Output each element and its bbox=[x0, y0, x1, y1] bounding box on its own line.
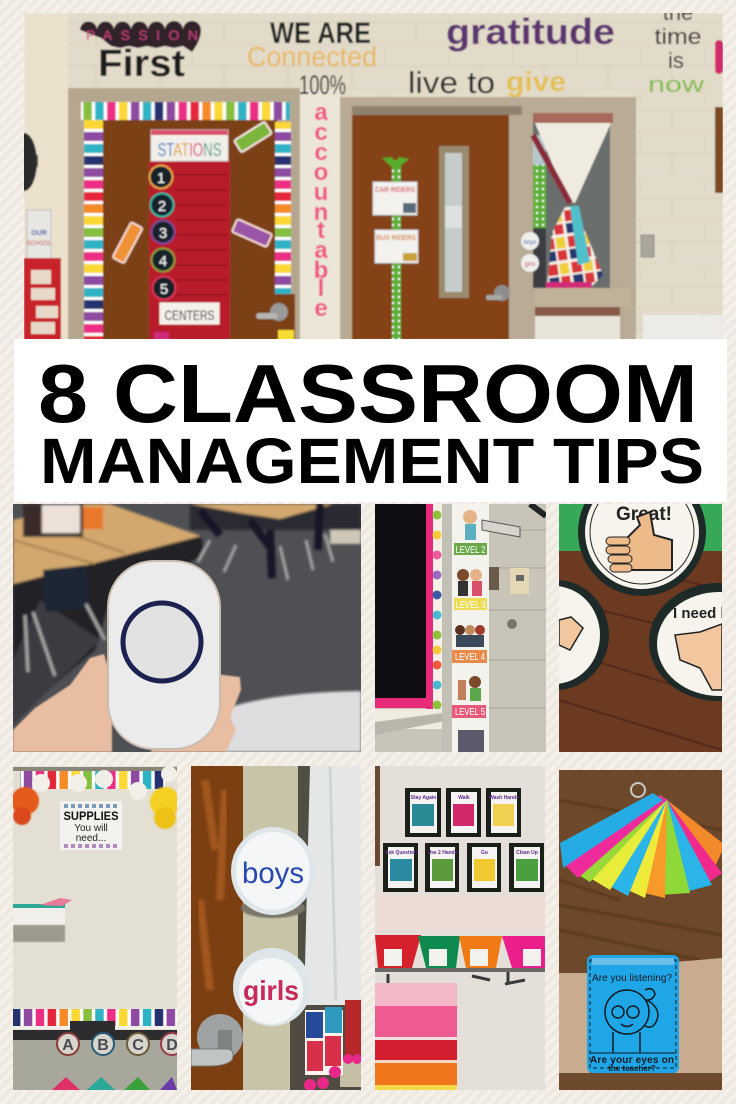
wall word: gratitude: gratitude bbox=[446, 11, 615, 52]
curtain bbox=[533, 113, 613, 288]
left door bbox=[68, 88, 300, 340]
left poster and red chart: OUR bbox=[31, 230, 47, 237]
card: great bbox=[578, 504, 706, 596]
pencils bbox=[112, 122, 272, 263]
boys and girls passes: girls bbox=[524, 262, 536, 268]
wall word: the time is now: now bbox=[648, 72, 704, 97]
door handle bbox=[256, 303, 288, 321]
poster grid: Ask Question bbox=[385, 850, 417, 856]
window bbox=[533, 113, 610, 288]
left poster and red chart: SCHOOL bbox=[26, 241, 52, 247]
supplies sign bbox=[60, 801, 122, 850]
photo: color fan and blue wristband bbox=[559, 770, 725, 1090]
level chart: LEVEL 5 bbox=[455, 707, 485, 718]
wall word: accountable vertical: a bbox=[314, 99, 328, 126]
supplies sign: You will bbox=[74, 823, 108, 834]
pocket chart with numbers: CENTERS bbox=[164, 307, 214, 323]
poster grid: Go bbox=[481, 850, 488, 856]
level chart: LEVEL 3 bbox=[456, 600, 486, 611]
wall fixtures bbox=[489, 504, 546, 629]
paper lanterns bbox=[32, 766, 177, 800]
poster grid: Use 2 Hands bbox=[427, 850, 458, 856]
pocket chart with numbers bbox=[149, 130, 230, 340]
photo: boys and girls pass knobs bbox=[191, 766, 362, 1091]
wall word: Passion First bbox=[80, 21, 201, 85]
girls knob bbox=[233, 948, 311, 1026]
title banner bbox=[14, 339, 727, 502]
card: left thumb bbox=[559, 580, 609, 690]
door lever bbox=[191, 1014, 243, 1066]
colored bins bbox=[375, 935, 545, 972]
wall word: live to give bbox=[409, 70, 566, 98]
wall word: accountable vertical: l bbox=[318, 275, 324, 302]
wall word: accountable vertical: b bbox=[314, 257, 328, 284]
hand bbox=[13, 654, 241, 752]
wall word: the time is now: is bbox=[668, 48, 684, 73]
pocket chart with numbers: 4 bbox=[159, 253, 167, 270]
boys knob: boys bbox=[242, 857, 304, 890]
right door bbox=[340, 97, 636, 340]
bulletin board bbox=[375, 504, 442, 735]
pocket chart with numbers: 2 bbox=[158, 198, 166, 215]
curtain bbox=[304, 766, 361, 1075]
arrow sign bbox=[482, 520, 520, 537]
poster grid: Clean Up bbox=[516, 850, 538, 856]
tissue flowers bbox=[11, 787, 180, 829]
button ring bbox=[123, 603, 201, 681]
wall word: accountable vertical: c bbox=[314, 139, 328, 166]
hanging tags bbox=[52, 1077, 177, 1090]
wall word: the time is now: the bbox=[663, 0, 693, 25]
tables bbox=[13, 504, 333, 584]
wall word: live to give: give bbox=[506, 66, 566, 97]
photo: supplies wall bbox=[11, 766, 183, 1090]
shelf brackets bbox=[388, 972, 525, 985]
wall word: the time is now: time bbox=[654, 24, 702, 49]
boys and girls passes bbox=[521, 232, 539, 272]
photo: classroom doors and wall words bbox=[11, 0, 723, 340]
rainbow border top bbox=[20, 771, 165, 789]
wall word: Passion First: First bbox=[98, 43, 185, 85]
wall tray bbox=[13, 898, 72, 942]
poster grid: Walk bbox=[458, 795, 470, 801]
boys and girls passes: boys bbox=[524, 240, 536, 246]
card: I need help bbox=[649, 583, 722, 701]
wristband: Are your eyes on bbox=[590, 1055, 674, 1066]
pocket chart with numbers: 5 bbox=[160, 281, 168, 298]
wall word: the time is now bbox=[649, 13, 704, 93]
pocket chart with numbers: 3 bbox=[159, 225, 167, 242]
level chart bbox=[452, 504, 489, 752]
pocket chart with numbers: 1 bbox=[157, 170, 165, 187]
level chart: LEVEL 4 bbox=[455, 652, 485, 663]
pompoms bbox=[304, 1054, 362, 1091]
ribbon with cards: CAR RIDERS bbox=[375, 187, 415, 194]
wall word: accountable vertical: o bbox=[314, 159, 328, 186]
fan of colored strips bbox=[560, 793, 725, 898]
wall word: Passion First: PASSION bbox=[86, 27, 198, 43]
poster grid: Stay Again bbox=[411, 795, 436, 801]
poster grid bbox=[383, 788, 544, 892]
supplies sign: need... bbox=[76, 833, 106, 844]
rainbow border bottom bbox=[13, 1009, 177, 1026]
poster grid: Wash Hands bbox=[489, 795, 519, 801]
girls knob: girls bbox=[243, 975, 299, 1006]
level chart: LEVEL 2 bbox=[456, 545, 486, 556]
wristband bbox=[587, 955, 679, 1073]
photo: level chart by bulletin board bbox=[375, 504, 546, 752]
chairs bbox=[25, 504, 333, 676]
right edge details bbox=[643, 40, 723, 340]
wall word: accountable vertical: a bbox=[314, 237, 328, 264]
letter badges: A bbox=[62, 1037, 74, 1054]
wristband: Are you listening? bbox=[592, 973, 672, 984]
ring bbox=[631, 783, 645, 797]
photo: doorbell button in hand bbox=[13, 504, 361, 752]
wall word: accountable vertical bbox=[314, 99, 328, 322]
letter badges: B bbox=[97, 1037, 109, 1054]
ribbon with cards: BUS RIDERS bbox=[376, 235, 416, 242]
light switch bbox=[641, 235, 654, 257]
plastic drawers bbox=[375, 983, 457, 1090]
arm bbox=[559, 958, 722, 1073]
supplies sign: SUPPLIES bbox=[64, 809, 118, 823]
card: great: Great! bbox=[616, 504, 672, 525]
dark ledge bbox=[13, 1021, 177, 1090]
wall word: we are connected bbox=[248, 22, 376, 67]
wall word: accountable vertical: c bbox=[314, 119, 328, 146]
white table bbox=[225, 691, 361, 752]
title line 2: MANAGEMENT TIPS bbox=[40, 425, 704, 497]
photo: posters, bins and drawers bbox=[375, 766, 545, 1090]
wall word: accountable vertical: e bbox=[314, 295, 328, 322]
left poster and red chart bbox=[24, 210, 61, 340]
wall word: accountable vertical: n bbox=[314, 199, 328, 226]
wall word: live to give: live to bbox=[408, 65, 495, 100]
wall word: we are connected: WE ARE bbox=[270, 17, 371, 50]
teacher character bbox=[605, 989, 658, 1053]
wall word: 100%: 100% bbox=[299, 70, 346, 100]
boys knob bbox=[231, 827, 315, 918]
wall word: accountable vertical: u bbox=[314, 179, 328, 206]
lower curtain bbox=[535, 307, 620, 340]
ribbon with cards bbox=[373, 157, 418, 340]
wall clock bbox=[24, 132, 39, 192]
wall word: we are connected: Connected bbox=[247, 41, 377, 72]
door knob bbox=[486, 285, 510, 301]
doorbell bbox=[108, 561, 220, 749]
pocket chart with numbers: STATIONS bbox=[158, 140, 222, 160]
letter badges: D bbox=[166, 1037, 178, 1054]
letter badges bbox=[57, 1033, 183, 1055]
photo: thumbs up and down cards bbox=[559, 504, 722, 752]
letter badges: C bbox=[132, 1037, 144, 1054]
title line 1: 8 CLASSROOM bbox=[38, 347, 698, 440]
wristband: the teacher? bbox=[608, 1064, 656, 1073]
wall word: accountable vertical: t bbox=[317, 217, 325, 244]
tissue box and orange object bbox=[23, 504, 103, 537]
